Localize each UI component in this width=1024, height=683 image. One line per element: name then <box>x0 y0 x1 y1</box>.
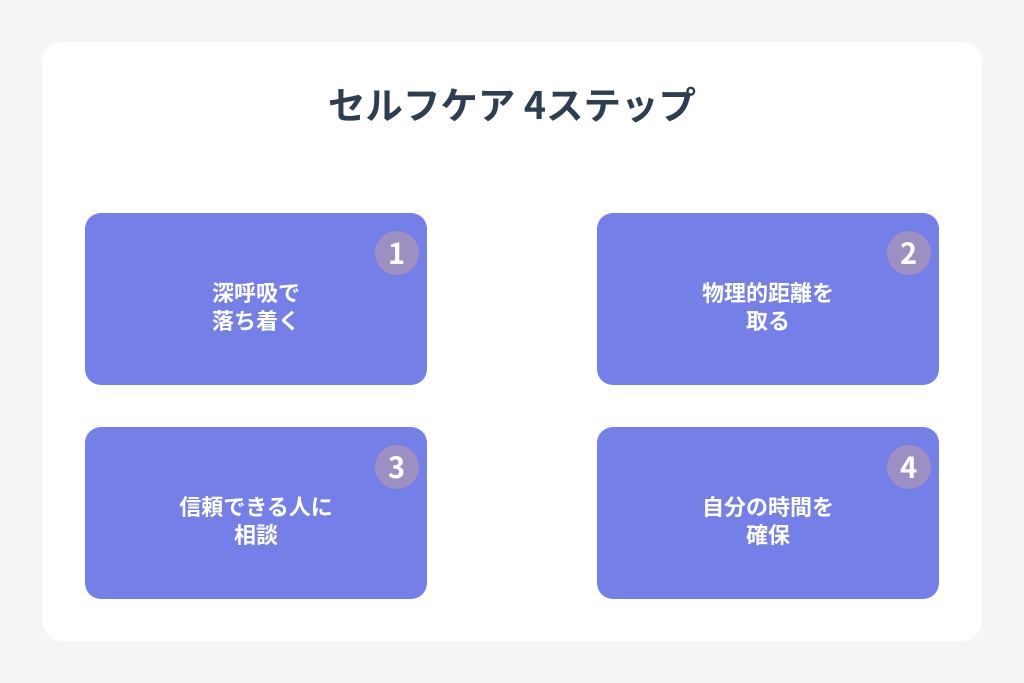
step 2 text: 物理的距離を <box>702 276 834 308</box>
step 2 number badge <box>887 231 931 275</box>
panel: step 3 <box>85 427 427 599</box>
step 4 text <box>702 490 834 550</box>
step 1 number badge: 1 <box>388 231 405 273</box>
panel: step 2 <box>597 213 939 385</box>
step 4 text: 確保 <box>746 518 790 550</box>
title: セルフケア 4ステップ <box>328 75 696 130</box>
step 1 text: 深呼吸で <box>212 276 300 308</box>
step 3 text: 信頼できる人に <box>179 490 333 522</box>
step 1 number badge <box>375 231 419 275</box>
step 3 text: 相談 <box>234 518 278 550</box>
step 3 text <box>179 490 333 550</box>
step 4 number badge <box>887 445 931 489</box>
step 3 number badge: 3 <box>388 445 405 487</box>
step 4 number badge: 4 <box>900 445 917 487</box>
panel: step 1 <box>85 213 427 385</box>
step 3 number badge <box>375 445 419 489</box>
panel: step 4 <box>597 427 939 599</box>
step 2 text: 取る <box>746 304 790 336</box>
step 4 text: 自分の時間を <box>702 490 834 522</box>
step 2 number badge: 2 <box>900 231 917 273</box>
step 1 text: 落ち着く <box>212 304 300 336</box>
step 1 text <box>212 276 300 336</box>
step 2 text <box>702 276 834 336</box>
